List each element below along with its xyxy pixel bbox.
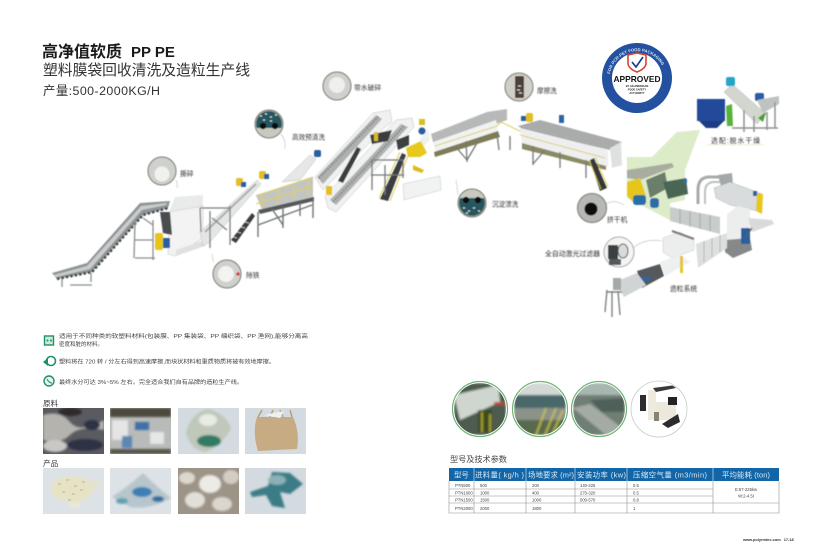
bullet 1: 密度和脏的材料。 — [59, 340, 103, 348]
parameter table section — [449, 454, 779, 513]
callout: iron removal — [212, 254, 260, 288]
crusher incline conveyors — [315, 110, 441, 212]
extruder — [627, 163, 688, 208]
footer website and page number: www.polyrmtec.com 17-18 — [742, 537, 794, 542]
approved badge — [602, 43, 672, 113]
bullet 3: 最终水分可达 3%~5% 左右。完全适合我们自有品牌的造粒生产线。 — [59, 378, 243, 386]
approved badge: BY AN AMERICAN — [626, 84, 648, 88]
label: pelletizing: 造粒系统 — [670, 284, 697, 293]
table rows: PTN1000 — [455, 490, 473, 496]
table rows: PTN1500 — [455, 498, 473, 502]
table rows: 1500 — [480, 498, 490, 502]
second washer and stairs — [518, 113, 622, 191]
table rows: PTN2000 — [455, 506, 473, 511]
conveyor and frame 2 — [200, 171, 269, 248]
bullet 2 — [43, 356, 275, 366]
table — [449, 468, 779, 513]
subheading: 塑料膜袋回收清洗及造粒生产线 — [43, 62, 250, 79]
approved badge: APPROVED — [613, 74, 661, 84]
photo: blue flakes — [110, 468, 171, 514]
table header — [449, 468, 779, 481]
approved badge: AUTHORITY — [629, 91, 645, 95]
photo: teal film — [245, 468, 306, 514]
callout: laser filter: 全自动激光过滤器 — [545, 249, 600, 258]
optional dewatering dryer machine — [697, 77, 779, 132]
photo: white cups — [178, 468, 239, 514]
callout: shredding — [148, 157, 194, 188]
table header: 型号 — [454, 470, 469, 480]
table grid — [449, 481, 779, 513]
pelletizing system — [605, 231, 727, 317]
photo: wash tanks — [572, 382, 626, 436]
photo: film bales — [43, 408, 104, 454]
callout: friction wash: 摩擦洗 — [537, 86, 557, 95]
callout: squeezer — [578, 194, 628, 224]
green highlight extruder zone — [627, 130, 700, 220]
photo: bulk bag — [245, 408, 306, 454]
approved badge: FOR PCR-PET FOOD PACKAGING — [607, 48, 664, 74]
table rows: 400 — [532, 490, 540, 496]
bullet 1 — [44, 332, 309, 348]
infeed conveyor — [52, 201, 170, 287]
photo: factory floor stairs — [512, 382, 568, 436]
callout: sink-float rinse — [456, 180, 519, 217]
production line machinery — [52, 77, 779, 317]
bullet 3 — [44, 376, 243, 386]
title block — [42, 42, 250, 98]
table rows: 0.8 — [633, 498, 639, 502]
photo: washing line closeup — [452, 382, 508, 436]
friction washer trough — [431, 109, 528, 162]
washing and drying section — [670, 173, 774, 258]
label: optional dryer — [706, 136, 764, 145]
callout: iron removal: 除铁 — [246, 270, 260, 280]
table rows: 140-225 — [580, 483, 596, 488]
raw materials section — [43, 398, 306, 454]
bullet 1: 适用于不同种类的软塑料材料(包装膜、PP 集装袋、PP 编织袋、PP 渔网),能够分离高 — [59, 332, 309, 340]
table rows: 500 — [480, 483, 488, 488]
table header: 平均能耗 (ton) — [722, 470, 770, 480]
table rows: 1800 — [532, 506, 542, 511]
table rows: 2000 — [480, 506, 490, 511]
table rows: 0.5 — [633, 490, 639, 496]
callout: laser filter — [545, 237, 662, 267]
table header: 进料量( kg/h ) — [475, 470, 524, 480]
shredder hopper — [155, 195, 205, 256]
approved badge: FOOD SAFETY — [628, 88, 646, 92]
callout: sink-float rinse: 沉淀漂洗 — [492, 200, 519, 208]
table rows — [455, 483, 758, 511]
table header: 压缩空气量 (m3/min) — [633, 470, 707, 480]
table rows: 0.5 — [633, 483, 639, 488]
capacity: 产量:500-2000KG/H — [43, 84, 160, 98]
photo: pellets — [43, 468, 104, 514]
heading: products: 产品 — [43, 458, 59, 468]
table rows: 1 — [633, 506, 636, 511]
pre-wash tank — [256, 150, 321, 237]
heading: 高净值软质 PP PE — [42, 42, 175, 61]
table rows: E:67-225kw — [735, 487, 758, 492]
photo: extruder cutaway — [631, 381, 687, 437]
table header: 场地要求 (m²) — [528, 470, 574, 480]
process callout circles — [148, 72, 764, 293]
table rows: PTN500 — [455, 483, 471, 488]
table rows: 200 — [532, 483, 540, 488]
table rows: 270-320 — [580, 490, 596, 496]
callout: wet crushing — [323, 72, 381, 100]
heading: table title: 型号及技术参数 — [450, 454, 507, 464]
table rows: 1000 — [480, 490, 490, 496]
callout: shredding: 撕碎 — [180, 169, 194, 178]
callout: pre-wash — [255, 110, 325, 149]
products section — [43, 458, 306, 514]
table header: 安装功率 (kw) — [577, 470, 626, 480]
feature bullets — [43, 332, 309, 386]
bullet 2: 塑料将在 720 转 / 分左右得到高速摩擦,而块状材料和重质物质将被有效地摩擦。 — [59, 358, 275, 366]
photo: baled bags — [110, 408, 171, 454]
round factory photos — [452, 381, 687, 437]
label: optional dryer: 选配:脱水干燥 — [711, 136, 760, 145]
callout: pre-wash: 高效预清洗 — [292, 132, 325, 142]
table rows: 500-570 — [580, 498, 596, 502]
callout: squeezer: 挤干机 — [607, 215, 628, 224]
photo: green film — [178, 408, 239, 454]
table rows: 1000 — [532, 498, 542, 502]
heading: raw materials: 原料 — [43, 398, 59, 408]
callout: wet crushing: 带水破碎 — [354, 83, 381, 92]
callout: friction wash — [505, 73, 557, 101]
table rows: W:2-4.5t — [738, 494, 755, 498]
